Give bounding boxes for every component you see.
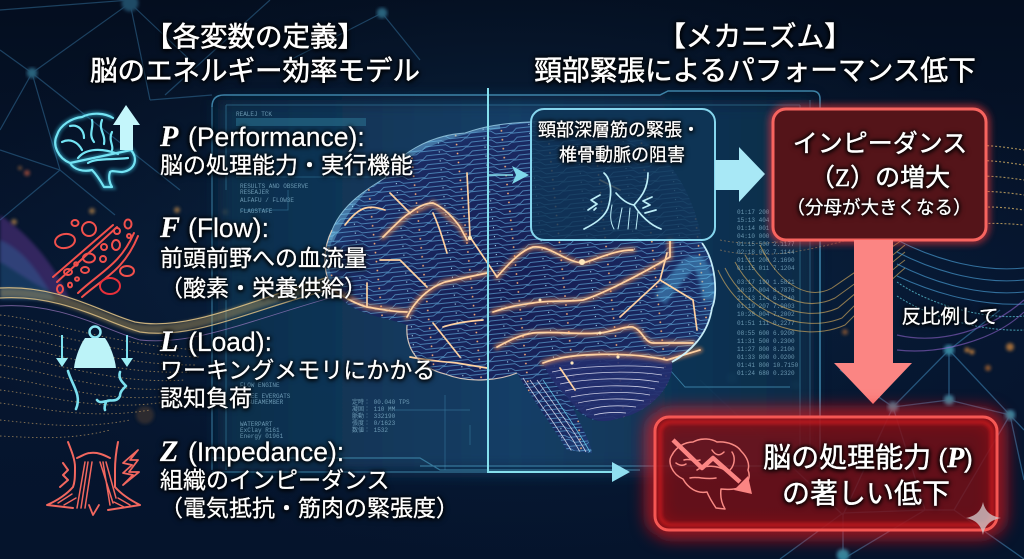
definition: L: L <box>159 325 178 358</box>
central holographic panel: SUSUEAMEMBER <box>240 399 284 406</box>
definition: F: 前頭前野への血流量 <box>160 245 367 271</box>
central holographic panel: 脈動： 332190 <box>352 412 396 420</box>
background network: bottom right <box>700 310 1024 559</box>
impedance text: （分母が大きくなる） <box>786 197 972 218</box>
performance drop text <box>763 442 973 509</box>
central holographic panel: 01:33 800 0.0200 <box>737 354 795 361</box>
icon: weight on head <box>56 326 133 410</box>
central holographic panel: REALEJ TCK <box>236 111 272 118</box>
definition: L: (Load): <box>188 327 272 357</box>
definition: F <box>159 211 367 301</box>
definition: Z: 組織のインピーダンス <box>160 467 390 493</box>
central holographic panel: FLOW ENGINE <box>240 382 280 389</box>
definition: Z <box>159 435 459 521</box>
central holographic panel: RESEAJER <box>240 189 269 196</box>
central holographic panel: 01:11 200 2.1690 <box>737 257 795 264</box>
heading: variable definitions: 脳のエネルギー効率モデル <box>90 55 420 86</box>
definition: F: F <box>159 211 180 244</box>
central holographic panel: 02:18 002 7.1144 <box>737 249 795 256</box>
impedance text: インピーダンス <box>793 130 967 158</box>
heading: variable definitions: 【各変数の定義】 <box>145 21 365 52</box>
box text <box>538 120 700 165</box>
icon: blood vessel and cells <box>53 220 138 297</box>
definition: F: （酸素・栄養供給） <box>160 275 367 301</box>
arrow: inverse proportion down <box>834 240 912 404</box>
central holographic panel: 10:28 004 7.2002 <box>737 311 795 318</box>
definition: Z: (Impedance): <box>188 437 344 467</box>
icon: brain with up arrow <box>55 105 140 187</box>
definition: P: P <box>159 120 179 153</box>
box: neck muscle tension <box>531 109 715 240</box>
brain glowing folds <box>333 203 700 363</box>
definition: Z: （電気抵抗・筋肉の緊張度） <box>160 495 459 521</box>
wave lines: left <box>0 215 345 438</box>
heading: mechanism: 頸部緊張によるパフォーマンス低下 <box>534 55 976 86</box>
central holographic panel: 11:27 800 8.2100 <box>737 346 795 353</box>
central holographic panel: WATERPART <box>240 421 273 428</box>
central holographic panel: 11:31 500 0.2300 <box>737 338 795 345</box>
central holographic panel: 04:10 000 <box>737 233 770 240</box>
box: impedance increase <box>773 109 986 240</box>
central holographic panel: 03:17 199 1.5821 <box>737 279 795 286</box>
definition: L: ワーキングメモリにかかる <box>160 357 435 383</box>
definition: Z: Z <box>159 435 178 468</box>
definition: F: (Flow): <box>188 213 269 243</box>
box text: 椎骨動脈の阻害 <box>559 145 685 165</box>
central holographic panel: 01:41 800 10.7150 <box>737 362 799 369</box>
central holographic panel: 凝固： 110 MM <box>352 405 396 413</box>
wave lines: right <box>718 146 1024 351</box>
definition: L <box>159 325 435 411</box>
central holographic panel: Energy 01961 <box>240 433 284 440</box>
central holographic panel: 21:13 124 6.1240 <box>737 295 795 302</box>
impedance text <box>786 130 972 218</box>
definition: L: 認知負荷 <box>160 385 252 411</box>
impedance text: （Z）の増大 <box>810 164 950 192</box>
central holographic panel: 数値： 1532 <box>352 426 388 434</box>
performance drop text: 脳の処理能力 (P) <box>763 442 973 474</box>
icon: brain with falling arrow <box>670 439 752 509</box>
decorative sparkle icon <box>966 502 1001 535</box>
arrow: to tension box <box>512 166 529 184</box>
brain illustration <box>324 122 716 453</box>
definition: P: (Performance): <box>188 122 365 152</box>
central holographic panel: 10:37 004 8.7876 <box>737 287 795 294</box>
central holographic panel: 01:51 111 0.2277 <box>737 320 795 327</box>
heading: mechanism <box>534 21 976 86</box>
background network: top left <box>0 0 420 220</box>
box: performance drop <box>655 417 997 530</box>
central holographic panel: 01:24 680 0.2320 <box>737 370 795 377</box>
central holographic panel: ALFAFU / FLOW3E <box>240 197 294 204</box>
central holographic panel: 08:55 600 6.9200 <box>737 330 795 337</box>
central holographic panel: 定時： 00.040 TPS <box>352 398 410 406</box>
central holographic panel: 01:19 207 7.9003 <box>737 303 795 310</box>
central holographic panel: 01:14 001 <box>737 225 770 232</box>
heading: variable definitions <box>90 21 420 86</box>
icon: neck with strain <box>584 173 661 229</box>
central holographic panel: AGAEE EVERGATS <box>240 393 291 400</box>
performance drop text: の著しい低下 <box>782 478 950 509</box>
heading: mechanism: 【メカニズム】 <box>658 21 852 52</box>
flow connector: vertical line with branches <box>488 88 630 482</box>
central holographic panel <box>212 91 820 472</box>
central holographic panel: ExClay R161 <box>240 427 280 434</box>
central holographic panel: 01:15 500 2.1177 <box>737 241 795 248</box>
icon: neck muscles with strain <box>47 442 140 515</box>
central holographic panel: 01:17 200 <box>737 209 770 216</box>
central holographic panel: RESULTS AND OBSERVE <box>240 183 309 190</box>
arrow: to performance drop box <box>612 462 630 482</box>
central holographic panel: FLAGSTAFE <box>240 208 273 215</box>
box text: 頸部深層筋の緊張・ <box>538 120 700 140</box>
definition: P <box>159 120 413 178</box>
central holographic panel: 張度： 0/1623 <box>352 419 396 427</box>
label: inverse proportion: 反比例して <box>902 306 998 328</box>
central holographic panel: 01:15 011 7.1204 <box>737 265 795 272</box>
bokeh particles <box>11 166 1014 424</box>
arrow: tension to impedance <box>715 147 765 202</box>
central holographic panel: 15:13 404 <box>737 217 770 224</box>
definition: P: 脳の処理能力・実行機能 <box>160 152 413 178</box>
